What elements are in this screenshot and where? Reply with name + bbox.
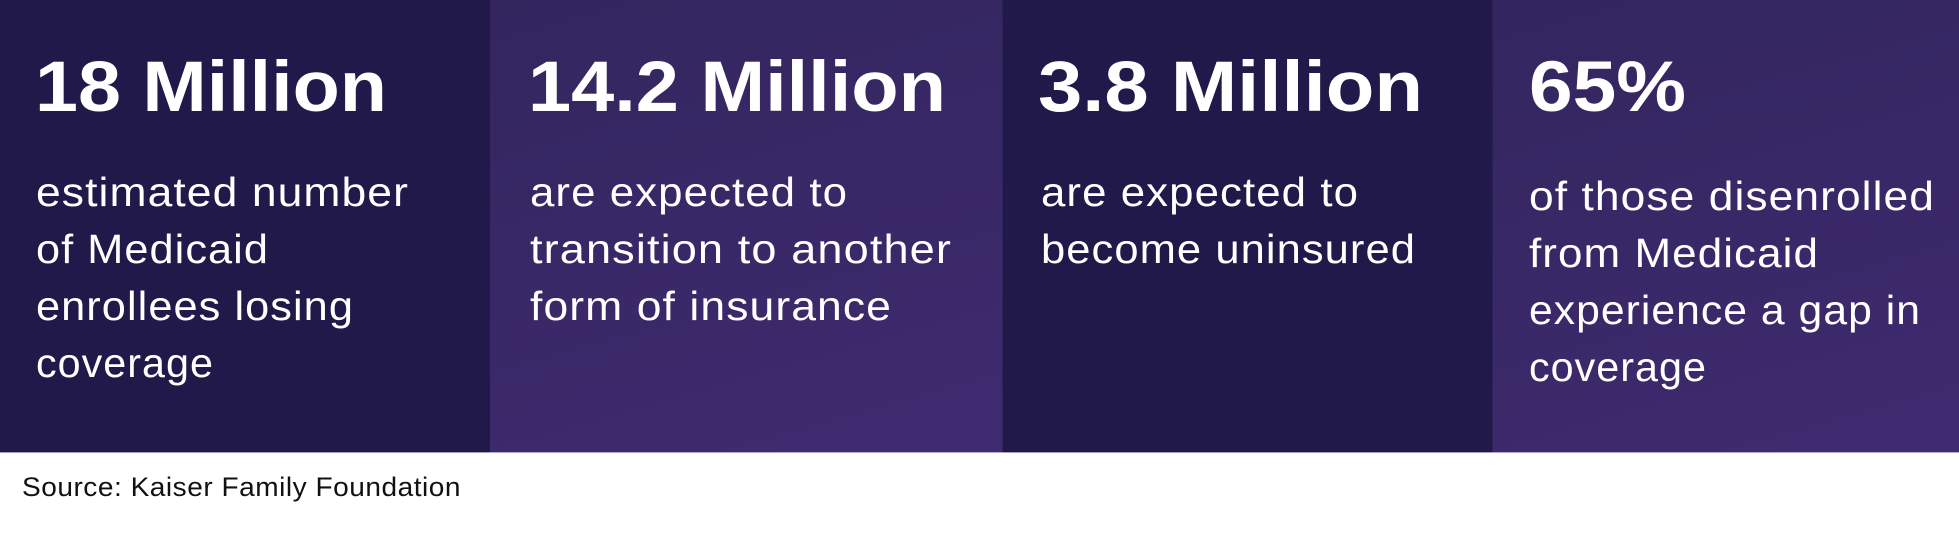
panel: 14.2 million	[490, 0, 1002, 452]
text: of those disenrolled from Medicaid experience a gap in coverage: from Medicaid	[1529, 230, 1819, 276]
text: of those disenrolled from Medicaid experience a gap in coverage: experience a gap in	[1529, 287, 1921, 333]
source note: Source: Kaiser Family Foundation	[22, 472, 461, 502]
text: estimated number of Medicaid enrollees losing coverage	[36, 169, 409, 386]
text: of those disenrolled from Medicaid experience a gap in coverage: coverage	[1529, 344, 1707, 390]
heading: 18 Million: 18 Million	[35, 48, 387, 127]
text: of those disenrolled from Medicaid experience a gap in coverage	[1529, 173, 1935, 390]
text: are expected to become uninsured	[1041, 169, 1416, 272]
text: are expected to become uninsured: are expected to	[1041, 169, 1359, 215]
panel: 65 percent	[1492, 0, 1959, 452]
text: of those disenrolled from Medicaid experience a gap in coverage: of those disenrolled	[1529, 173, 1935, 219]
panel: 18 million	[0, 0, 490, 452]
text: estimated number of Medicaid enrollees losing coverage: of Medicaid	[36, 226, 269, 272]
text: estimated number of Medicaid enrollees losing coverage: estimated number	[36, 169, 409, 215]
text: estimated number of Medicaid enrollees losing coverage: enrollees losing	[36, 283, 354, 329]
heading: 3.8 Million: 3.8 Million	[1038, 48, 1423, 127]
text: are expected to transition to another form of insurance: form of insurance	[530, 283, 892, 329]
text: are expected to transition to another form of insurance: transition to another	[530, 226, 952, 272]
text: are expected to transition to another form of insurance: are expected to	[530, 169, 848, 215]
text: are expected to become uninsured: become uninsured	[1041, 226, 1416, 272]
text: estimated number of Medicaid enrollees losing coverage: coverage	[36, 340, 214, 386]
text: are expected to transition to another form of insurance	[530, 169, 952, 329]
panel: 3.8 million	[1002, 0, 1493, 452]
heading: 14.2 Million: 14.2 Million	[528, 48, 946, 127]
heading: 65%: 65%	[1529, 48, 1686, 127]
